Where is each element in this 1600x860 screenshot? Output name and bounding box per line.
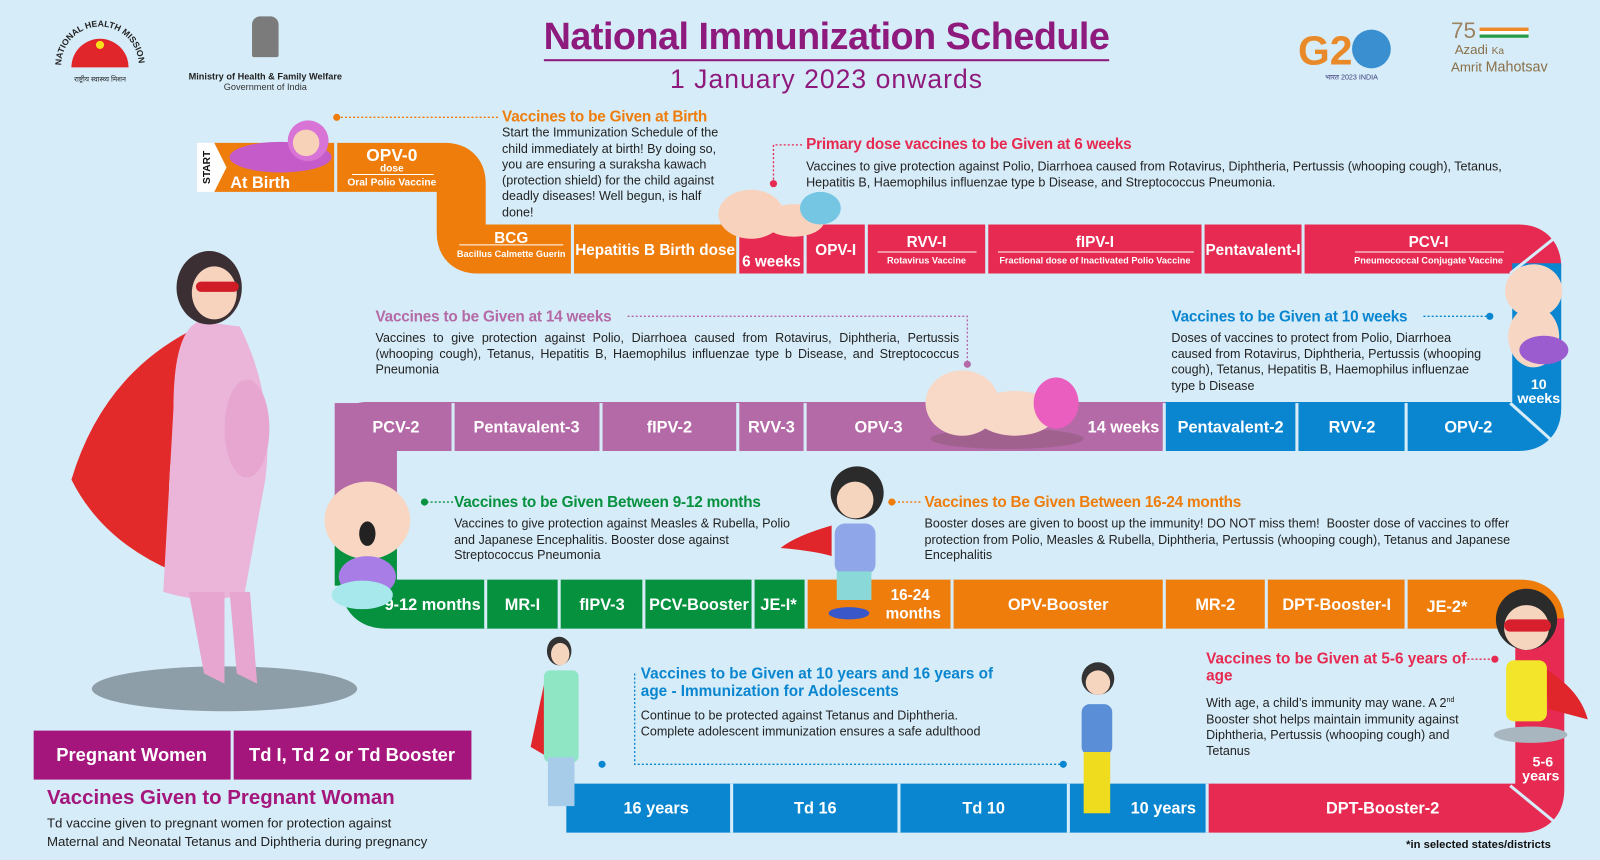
text: 6 weeks: Primary dose vaccines to be Given at 6 weeks — [806, 136, 1131, 153]
title: National Immunization Schedule — [544, 15, 1109, 57]
row 1 labels: Hepatitis B Birth dose — [575, 242, 735, 259]
row 1 labels: BCG — [494, 230, 528, 247]
figure: boy 5-6 years — [1494, 588, 1588, 743]
row 1 labels: OPV-I — [815, 242, 856, 259]
text: 16-24 months: Booster doses are given to boost up the immunity! DO NOT miss them! Booster dose of vaccines to offer protection from Polio, Measles & Rubella, Diphtheria, Pertussis (whooping cough), Tetanus and Japanese Encephalitis — [924, 516, 1510, 562]
title — [544, 15, 1110, 94]
logo: Ministry of Health: Government of India — [224, 82, 307, 92]
text: 16-24 months: Vaccines to Be Given Between 16-24 months — [924, 494, 1241, 511]
row 1 labels: At Birth — [230, 174, 290, 192]
text: adolescents — [640, 665, 994, 739]
logo: Azadi Ka Amrit Mahotsav: Amrit Mahotsav — [1451, 58, 1548, 74]
row 3 labels: 16-24 — [891, 587, 930, 604]
figure: pregnant woman — [71, 251, 358, 712]
text: 6 weeks — [806, 136, 1502, 189]
row 3 labels: DPT-Booster-I — [1282, 596, 1391, 614]
row 4 labels: 16 years — [623, 799, 689, 817]
logo: National Health Mission — [55, 20, 145, 84]
pregnant women boxes: Td I, Td 2 or Td Booster — [249, 744, 455, 765]
row 2 labels: 14 weeks — [1088, 419, 1159, 437]
text: 14 weeks — [376, 308, 959, 377]
row 1 labels: Oral Polio Vaccine — [347, 178, 437, 189]
logo: Ministry of Health — [189, 16, 342, 92]
text: 9-12 months — [454, 494, 790, 562]
text: at birth: Vaccines to be Given at Birth — [502, 108, 707, 126]
text: pregnant woman: Vaccines Given to Pregnant Woman — [47, 787, 395, 809]
text: 5-6 years: Vaccines to be Given at 5-6 years of age — [1206, 650, 1466, 685]
figure: newborn in pink blanket — [230, 120, 332, 172]
logo: National Health Mission: राष्ट्रीय स्वास्थ्य मिशन — [74, 75, 127, 84]
text: 5-6 years — [1206, 650, 1466, 758]
footnote: *in selected states/districts — [1406, 839, 1551, 851]
text: 6 weeks: Vaccines to give protection against Polio, Diarrhoea caused from Rotavirus, Diphtheria, Pertussis (whooping cough), Tetanus, Hepatitis B, Haemophilus influenzae type b Disease, and Streptococcus Pneumonia. — [806, 159, 1502, 189]
text: pregnant woman: Td vaccine given to pregnant women for protection against — [47, 815, 391, 831]
row 1 labels: Pneumococcal Conjugate Vaccine — [1354, 255, 1503, 265]
row 3 labels: fIPV-3 — [579, 596, 625, 614]
logo: G20 — [1298, 29, 1391, 82]
text: 5-6 years: With age, a child’s immunity may wane. A 2nd Booster shot helps maintain immunity against Diphtheria, Pertussis (whooping cough) and Tetanus — [1206, 696, 1459, 758]
row 3 labels: months — [886, 605, 941, 622]
row 2 labels: 10 — [1531, 377, 1547, 393]
logo: National Health Mission: NATIONAL HEALTH MISSION — [55, 20, 145, 65]
text: at birth: Start the Immunization Schedule of the child immediately at birth! By doing so, you are ensuring a suraksha kawach (protection shield) for the child against deadly diseases! Well begun, is half done! — [502, 126, 718, 219]
row 3 labels: JE-2* — [1427, 598, 1468, 616]
row 4 labels: Td 16 — [794, 799, 837, 817]
row 3 labels — [385, 587, 1468, 622]
row 1 labels: RVV-I — [907, 234, 946, 251]
row 1 labels: 6 weeks — [742, 253, 801, 270]
row 3 labels: JE-I* — [760, 596, 797, 614]
pregnant women boxes: Pregnant Women — [56, 744, 207, 765]
row 2 labels: Pentavalent-2 — [1178, 419, 1284, 437]
logo: Azadi Ka Amrit Mahotsav: Azadi Ka — [1455, 42, 1504, 57]
row 2 labels — [372, 377, 1560, 437]
row 4 labels: DPT-Booster-2 — [1326, 799, 1439, 817]
row 1 labels: Rotavirus Vaccine — [887, 255, 966, 265]
row 1 labels: fIPV-I — [1076, 234, 1114, 251]
figure: 6 weeks baby — [718, 190, 841, 239]
text: 9-12 months: Vaccines to give protection against Measles & Rubella, Polio and Japanese Encephalitis. Booster dose against Streptococcus Pneumonia — [454, 516, 790, 562]
row 3 labels: 9-12 months — [385, 596, 481, 614]
row 3 labels: MR-I — [505, 596, 540, 614]
figure: adolescent girl — [530, 636, 579, 806]
row 3 labels: OPV-Booster — [1008, 596, 1109, 614]
figure: boy with red cape — [780, 466, 884, 620]
dotted connectors — [337, 117, 1495, 764]
text: adolescents: Continue to be protected against Tetanus and Diphtheria. — [641, 708, 958, 722]
row 3 labels: PCV-Booster — [649, 596, 749, 614]
row 1 labels: Bacillus Calmette Guerin — [457, 249, 566, 259]
row 2 labels: Pentavalent-3 — [473, 419, 580, 437]
logo: Azadi Ka Amrit Mahotsav: 75 — [1451, 17, 1476, 43]
row 4 labels: 10 years — [1131, 799, 1196, 817]
row 3 labels: MR-2 — [1195, 596, 1235, 614]
row 2 labels: PCV-2 — [372, 419, 419, 437]
logo: G20: G2 — [1298, 29, 1352, 73]
text: 10 weeks: Vaccines to be Given at 10 weeks — [1171, 308, 1407, 326]
row 1 labels: dose — [380, 163, 404, 174]
start tab — [197, 143, 227, 192]
text: 9-12 months: Vaccines to be Given Between 9-12 months — [454, 494, 761, 511]
row 2 labels: weeks — [1516, 391, 1560, 407]
text: adolescents: Vaccines to be Given at 10 years and 16 years of age - Immunization for Adolescents — [641, 665, 993, 700]
logo: Azadi Ka Amrit Mahotsav — [1451, 17, 1548, 74]
row 2 labels: fIPV-2 — [647, 419, 692, 437]
pregnant women boxes — [34, 731, 471, 780]
text: pregnant woman: Maternal and Neonatal Tetanus and Diphtheria during pregnancy — [47, 834, 427, 849]
row 2 labels: RVV-3 — [748, 419, 795, 437]
row 2 labels: RVV-2 — [1329, 419, 1375, 437]
row 1 labels: Fractional dose of Inactivated Polio Vaccine — [999, 255, 1190, 265]
row 4 labels: 5-6 — [1533, 754, 1553, 770]
text: 16-24 months — [924, 494, 1510, 562]
logo: Ministry of Health: Ministry of Health & Family Welfare — [189, 71, 342, 82]
figure: 14 weeks baby — [926, 370, 1084, 449]
row 1 labels: Pentavalent-I — [1205, 242, 1301, 259]
row 2 labels: OPV-2 — [1444, 419, 1492, 437]
text: adolescents: Complete adolescent immunization ensures a safe adulthood — [641, 724, 981, 739]
logo: G20: भारत 2023 INDIA — [1325, 74, 1378, 82]
figure: girl 10 years — [1082, 662, 1114, 814]
text: pregnant woman — [47, 787, 428, 849]
text: 14 weeks: Vaccines to be Given at 14 weeks — [376, 308, 611, 326]
figure: yawning baby — [324, 482, 410, 610]
row 4 labels — [623, 754, 1560, 817]
row 4 labels: Td 10 — [962, 799, 1005, 817]
title: 1 January 2023 onwards — [670, 63, 983, 94]
row 1 labels: PCV-I — [1409, 234, 1449, 251]
start tab: START — [202, 150, 213, 184]
figure: 10 weeks baby — [1505, 264, 1568, 368]
row 4 labels: years — [1522, 769, 1560, 785]
text: 10 weeks: Doses of vaccines to protect from Polio, Diarrhoea caused from Rotavirus, Diphtheria, Pertussis (whooping cough), Tetanus, Hepatitis B, Haemophilus influenzae type b Disease — [1171, 331, 1481, 392]
row 1 labels — [230, 145, 1503, 270]
row 1 labels: OPV-0 — [366, 145, 417, 165]
row 2 labels: OPV-3 — [855, 419, 903, 437]
text: 14 weeks: Vaccines to give protection against Polio, Diarrhoea caused from Rotavirus, Diphtheria, Pertussis (whooping cough), Tetanus, Hepatitis B, Haemophilus influenzae type b Disease, and Streptococcus Pneumonia — [376, 331, 959, 377]
